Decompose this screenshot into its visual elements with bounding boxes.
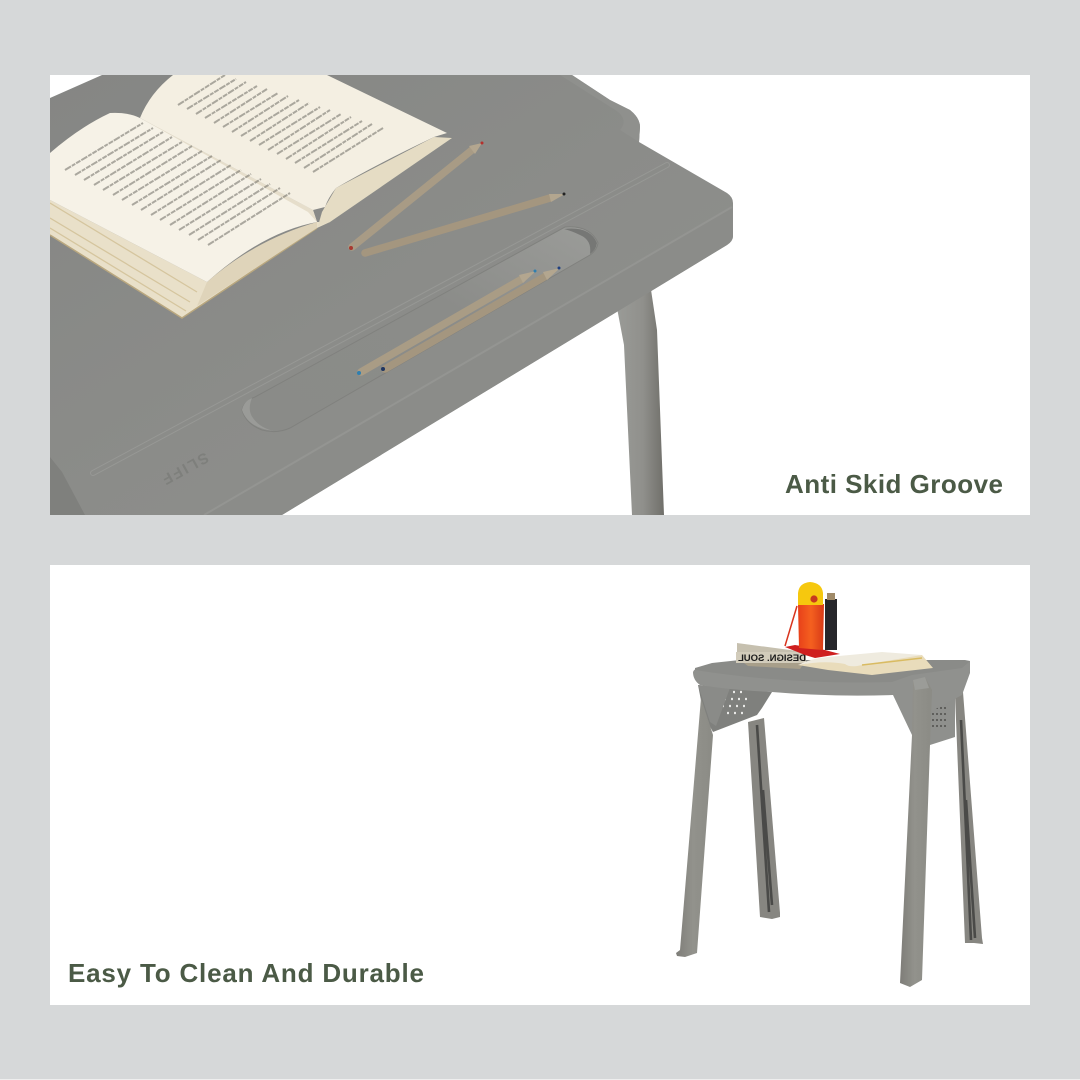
panel: anti skid groove (50, 75, 1030, 515)
tabletop top surface (695, 660, 970, 682)
right leg highlight (913, 677, 929, 690)
pencils in groove (357, 266, 560, 375)
left side panel (698, 685, 772, 732)
closed book: design soul (736, 643, 806, 669)
desk top surface (50, 75, 733, 515)
embossed brand mark: SLIFF (159, 449, 211, 488)
yellow cap (798, 582, 823, 605)
left page (50, 113, 317, 282)
right page (140, 75, 447, 210)
orange bottle body (798, 604, 824, 650)
left page underside (197, 222, 317, 306)
spine fold shadow (149, 123, 317, 222)
pencils on desk (349, 142, 566, 253)
surface groove line (93, 165, 667, 473)
panel: easy to clean and durable (50, 565, 1030, 1005)
right side panel (930, 695, 955, 745)
right back leg (955, 692, 983, 944)
pencil groove (242, 227, 598, 432)
left front leg (676, 698, 713, 957)
rim edge highlight (204, 207, 732, 515)
back left corner shadow (50, 457, 85, 515)
left bracket (698, 685, 730, 726)
open book on desk (798, 652, 933, 675)
closed book: design soul: DESIGN. SOUL (738, 653, 806, 664)
back lip highlight (572, 75, 640, 142)
photo: desk top close-up (50, 75, 733, 515)
right front leg (900, 677, 932, 987)
right page thickness (318, 137, 452, 226)
caption: anti skid groove: Anti Skid Groove (785, 469, 1003, 499)
page block (50, 200, 330, 318)
photo: full desk (676, 582, 983, 987)
left back leg (748, 718, 780, 919)
pencil tube (825, 593, 837, 650)
open book (50, 75, 452, 318)
right page text lines (178, 75, 383, 172)
book page block (798, 655, 933, 675)
caption: easy to clean and durable: Easy To Clean And Durable (68, 958, 424, 988)
left page text lines (65, 123, 290, 245)
right panel perforations (932, 708, 948, 726)
desk front rim (282, 236, 733, 515)
water bottle (785, 582, 840, 658)
book cover edges (50, 228, 317, 318)
red strap (785, 645, 840, 658)
desk leg (617, 283, 664, 515)
page block layers (50, 203, 197, 311)
book open pages (798, 652, 922, 666)
page edge stripe (862, 658, 922, 665)
tabletop rim (693, 661, 970, 735)
left panel perforations (722, 692, 747, 713)
cap button (810, 595, 818, 603)
